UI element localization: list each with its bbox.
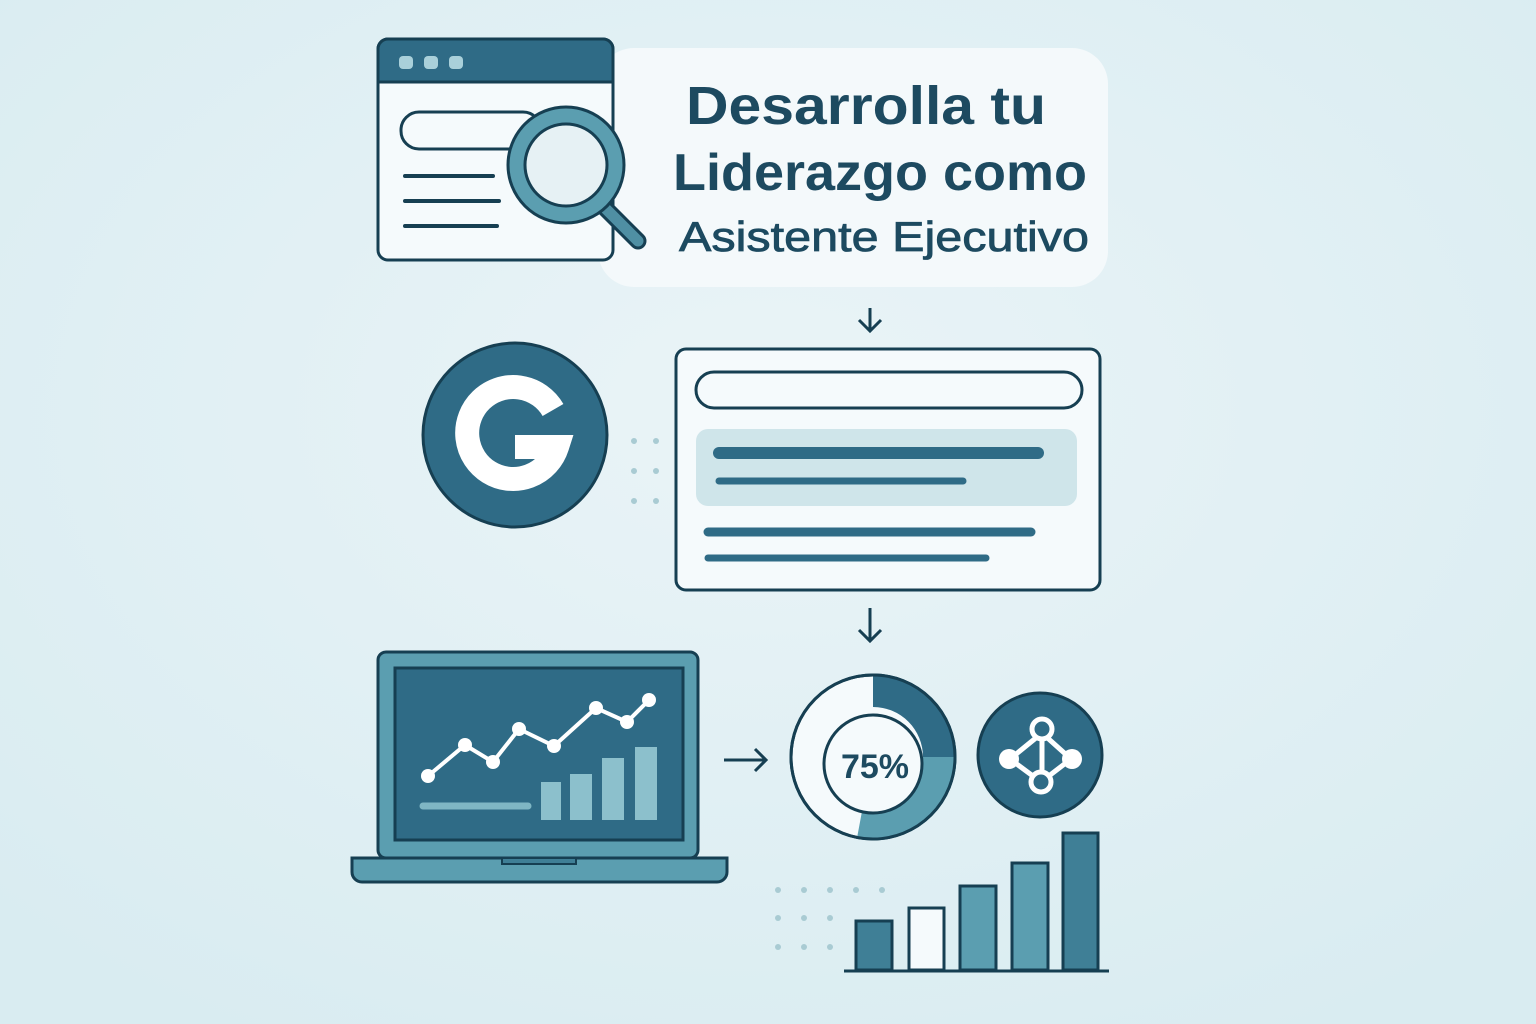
- arrow: laptop to donut: [724, 749, 766, 771]
- dots decoration: [775, 887, 885, 950]
- panel: search results: [676, 349, 1100, 590]
- title text: Asistente Ejecutivo: [679, 213, 1089, 260]
- title card: [598, 48, 1108, 287]
- arrow: results to analytics: [859, 608, 881, 641]
- arrow: title to results: [859, 308, 881, 331]
- icon: laptop with chart: [352, 652, 727, 882]
- donut chart 75%: [791, 675, 955, 840]
- bar chart: [844, 833, 1109, 971]
- title text: [673, 76, 1089, 260]
- icon: network: [978, 693, 1102, 817]
- icon: google G: [423, 343, 607, 527]
- icon: browser window with magnifier: [378, 39, 638, 260]
- donut chart 75%: 75%: [841, 748, 909, 786]
- title text: Liderazgo como: [673, 144, 1087, 202]
- title text: Desarrolla tu: [686, 76, 1046, 136]
- dots decoration: [631, 438, 659, 504]
